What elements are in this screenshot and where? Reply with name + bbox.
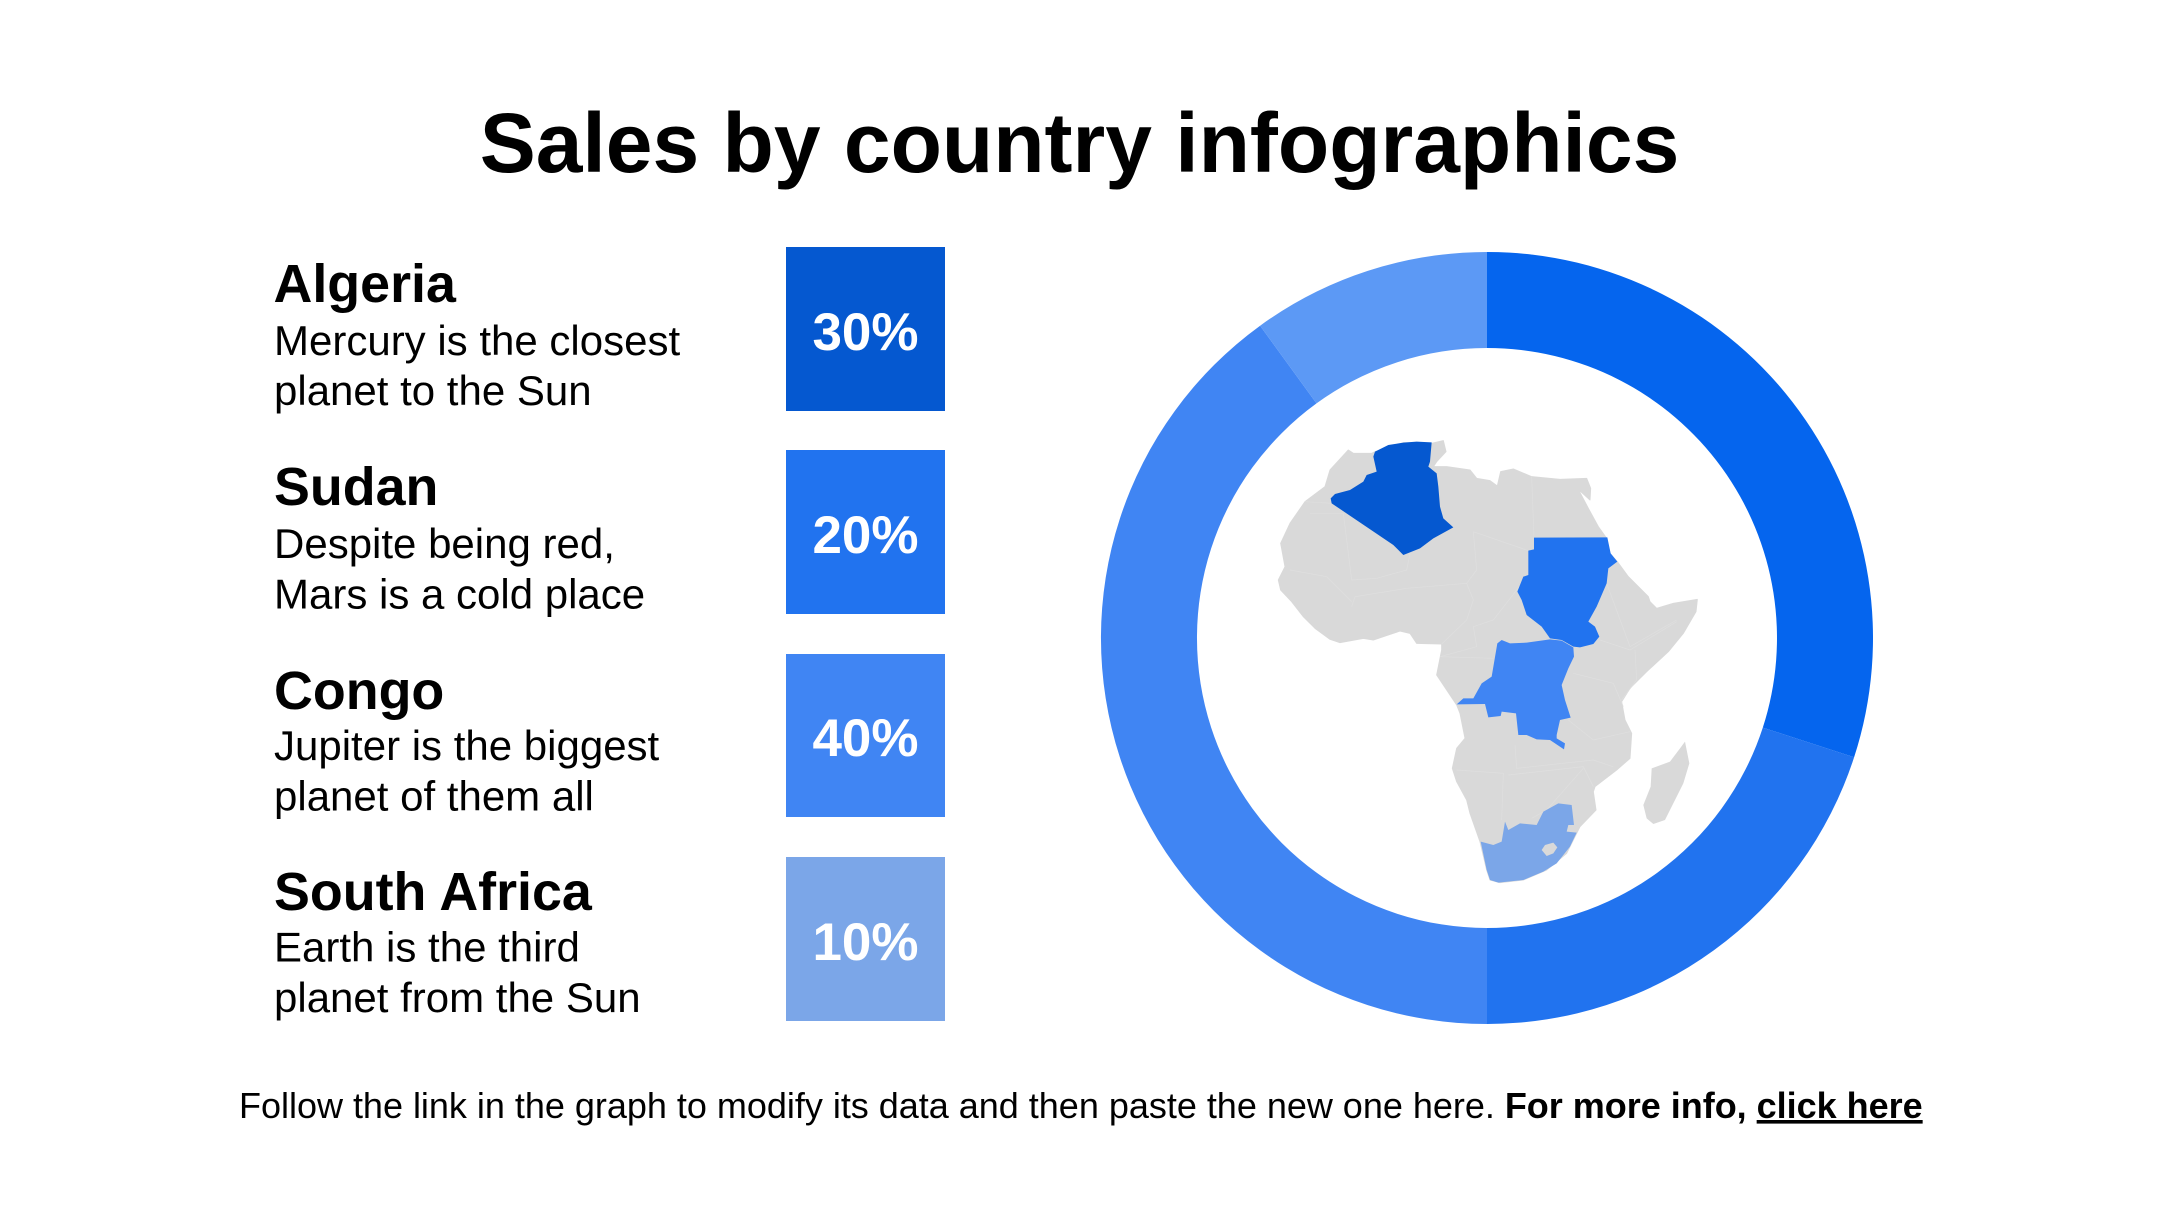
percentage box: 40%: 40% <box>812 709 919 768</box>
percentage box: 20% <box>786 450 945 614</box>
map: African continent <box>1278 441 1697 883</box>
percentage box: 30% <box>786 247 945 411</box>
text: South Africa description: Earth is the third <box>274 924 580 970</box>
segment: 20% <box>1487 728 1854 1024</box>
percentage box: 10%: 10% <box>812 913 919 972</box>
text: Sudan description: Despite being red, <box>274 520 615 567</box>
segment: 40% <box>1101 326 1487 1024</box>
map: South Africa <box>1481 803 1577 883</box>
footer note: Follow the link in the graph to modify its data and then paste the new one here. For more info, click here <box>239 1085 1923 1126</box>
panel: Algeria row <box>274 247 945 414</box>
percentage box: 10% <box>786 857 945 1021</box>
map: Algeria <box>1331 442 1453 555</box>
map: Congo <box>1457 639 1574 749</box>
map of Africa <box>1278 441 1697 883</box>
heading: Algeria: Algeria <box>274 254 457 314</box>
map: Lesotho <box>1542 843 1557 856</box>
text: South Africa description: planet from the Sun <box>274 974 641 1021</box>
percentage box: 40% <box>786 654 945 817</box>
heading: South Africa: South Africa <box>274 862 593 922</box>
map: Madagascar <box>1643 742 1689 824</box>
text: Congo description: planet of them all <box>274 772 594 820</box>
panel: Congo row <box>274 654 945 820</box>
heading: Sudan: Sudan <box>274 457 438 517</box>
map: Sudan <box>1517 537 1617 647</box>
segment: 30% <box>1487 252 1873 757</box>
percentage box: 30%: 30% <box>812 303 919 362</box>
heading: Congo: Congo <box>274 661 444 721</box>
percentage box: 20%: 20% <box>812 506 919 565</box>
panel: South Africa row <box>274 857 945 1021</box>
title: Sales by country infographics <box>480 96 1679 190</box>
text: Algeria description: planet to the Sun <box>274 367 592 414</box>
panel: Sudan row <box>274 450 945 618</box>
segment: 10% <box>1260 252 1487 403</box>
donut chart <box>1101 252 1873 1024</box>
text: Sudan description: Mars is a cold place <box>274 570 645 618</box>
text: Algeria description: Mercury is the closest <box>274 317 680 364</box>
text: Congo description: Jupiter is the biggest <box>274 722 660 769</box>
